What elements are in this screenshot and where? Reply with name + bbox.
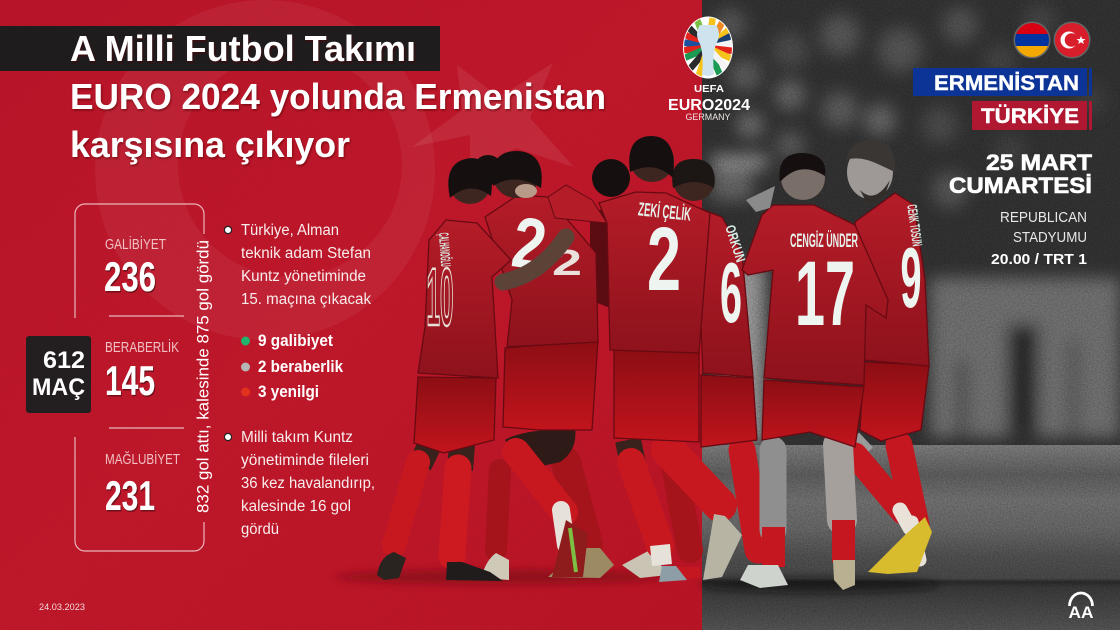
text block: Kuntz goals: Milli takım Kuntz <box>241 429 353 446</box>
player: Zeki Çelik, number 2 <box>548 136 742 582</box>
logo: UEFA EURO 2024: UEFA <box>694 84 724 95</box>
player: Orkun, number 6: ORKUN <box>722 223 749 264</box>
team bar: Ermenistan <box>913 68 1092 96</box>
player: Cengiz Ünder, number 17: 17 <box>795 243 855 345</box>
text block: Kuntz goals <box>224 429 375 538</box>
wins: 236 <box>104 253 156 300</box>
losses <box>105 450 180 519</box>
logo: Anadolu Agency: AA <box>1068 603 1094 622</box>
team bar: Türkiye <box>972 101 1092 130</box>
player: Zeki Çelik, number 2: 2 <box>647 210 681 310</box>
player: Cenk, number 9 <box>846 140 932 574</box>
losses: MAĞLUBİYET <box>105 450 180 468</box>
logo: UEFA EURO 2024 <box>668 10 750 122</box>
player: number 2, back legs: 2 <box>552 242 582 283</box>
draws <box>105 338 179 404</box>
draws: BERABERLİK <box>105 338 179 356</box>
frame of match record <box>75 204 204 551</box>
total matches badge <box>26 336 91 413</box>
player: Cenk, number 9: 9 <box>900 231 922 326</box>
player: Orkun, number 6 <box>672 159 758 550</box>
text block: Kuntz matches: Kuntz yönetiminde <box>241 268 366 285</box>
draws: 145 <box>105 357 155 404</box>
player: Cengiz Ünder, number 17 <box>740 153 888 590</box>
panel: match record <box>26 204 212 551</box>
total matches badge: 612 <box>43 347 85 374</box>
player: Zeki Çelik, number 2: ZEKİ ÇELİK <box>637 199 692 226</box>
wins: GALİBİYET <box>105 235 166 253</box>
flags: Armenia and Türkiye <box>1014 22 1090 58</box>
title <box>0 26 606 165</box>
title: A Milli Futbol Takımı <box>70 28 416 69</box>
date stamp: 24.03.2023 <box>39 602 85 613</box>
player: Çalhanoğlu, number 10: 10 <box>426 252 454 343</box>
text block: Kuntz goals: yönetiminde fileleri <box>241 452 369 469</box>
venue and broadcast <box>991 209 1087 268</box>
text block: Kuntz matches <box>224 222 371 308</box>
title: karşısına çıkıyor <box>70 124 350 165</box>
text block: Kuntz matches: 15. maçına çıkacak <box>241 291 371 308</box>
wins <box>104 235 166 300</box>
venue and broadcast: STADYUMU <box>1013 229 1087 246</box>
logo: UEFA EURO 2024: GERMANY <box>686 112 730 122</box>
player: behind heads <box>473 155 640 320</box>
legend: Kuntz record: 2 beraberlik <box>258 358 344 376</box>
text block: Kuntz goals: 36 kez havalandırıp, <box>241 475 375 492</box>
losses: 231 <box>105 472 155 519</box>
text block: Kuntz goals: kalesinde 16 gol <box>241 498 351 515</box>
text block: Kuntz matches: Türkiye, Alman <box>241 222 339 239</box>
hand on shoulder <box>515 184 537 198</box>
text block: Kuntz matches: teknik adam Stefan <box>241 245 371 262</box>
player: number 2, back legs <box>481 151 614 580</box>
logo: Anadolu Agency <box>1068 593 1094 622</box>
player: Cenk, number 9: CENK TOSUN <box>904 203 926 247</box>
venue and broadcast: REPUBLICAN <box>1000 209 1087 226</box>
vertical goals note: 832 gol attı, kalesinde 875 gol gördü <box>194 240 212 513</box>
player: number 2, back legs: 2 <box>507 202 551 286</box>
flag motif: faded crescent and star <box>95 0 574 340</box>
text block: Kuntz goals: gördü <box>241 521 279 538</box>
legend: Kuntz record: 3 yenilgi <box>258 383 319 401</box>
total matches badge: MAÇ <box>32 374 85 401</box>
player: Çalhanoğlu, number 10 <box>377 158 566 581</box>
tattooed arm <box>503 237 566 282</box>
team bar: Ermenistan: ERMENİSTAN <box>934 72 1079 95</box>
match date <box>949 150 1093 198</box>
match date: 25 MART <box>986 150 1093 175</box>
title: EURO 2024 yolunda Ermenistan <box>70 76 606 117</box>
legend: Kuntz record: 9 galibiyet <box>258 332 333 350</box>
logo: UEFA EURO 2024: EURO2024 <box>668 97 750 114</box>
match date: CUMARTESİ <box>949 173 1092 198</box>
player: Cengiz Ünder, number 17: CENGİZ ÜNDER <box>790 231 858 252</box>
player: Çalhanoğlu, number 10: ÇALHANOĞLU <box>436 232 455 267</box>
legend: Kuntz record <box>241 332 344 401</box>
team bar: Türkiye: TÜRKİYE <box>981 105 1079 128</box>
player: Orkun, number 6: 6 <box>720 246 742 341</box>
venue and broadcast: 20.00 / TRT 1 <box>991 251 1087 268</box>
illustration: team huddle <box>335 136 940 593</box>
